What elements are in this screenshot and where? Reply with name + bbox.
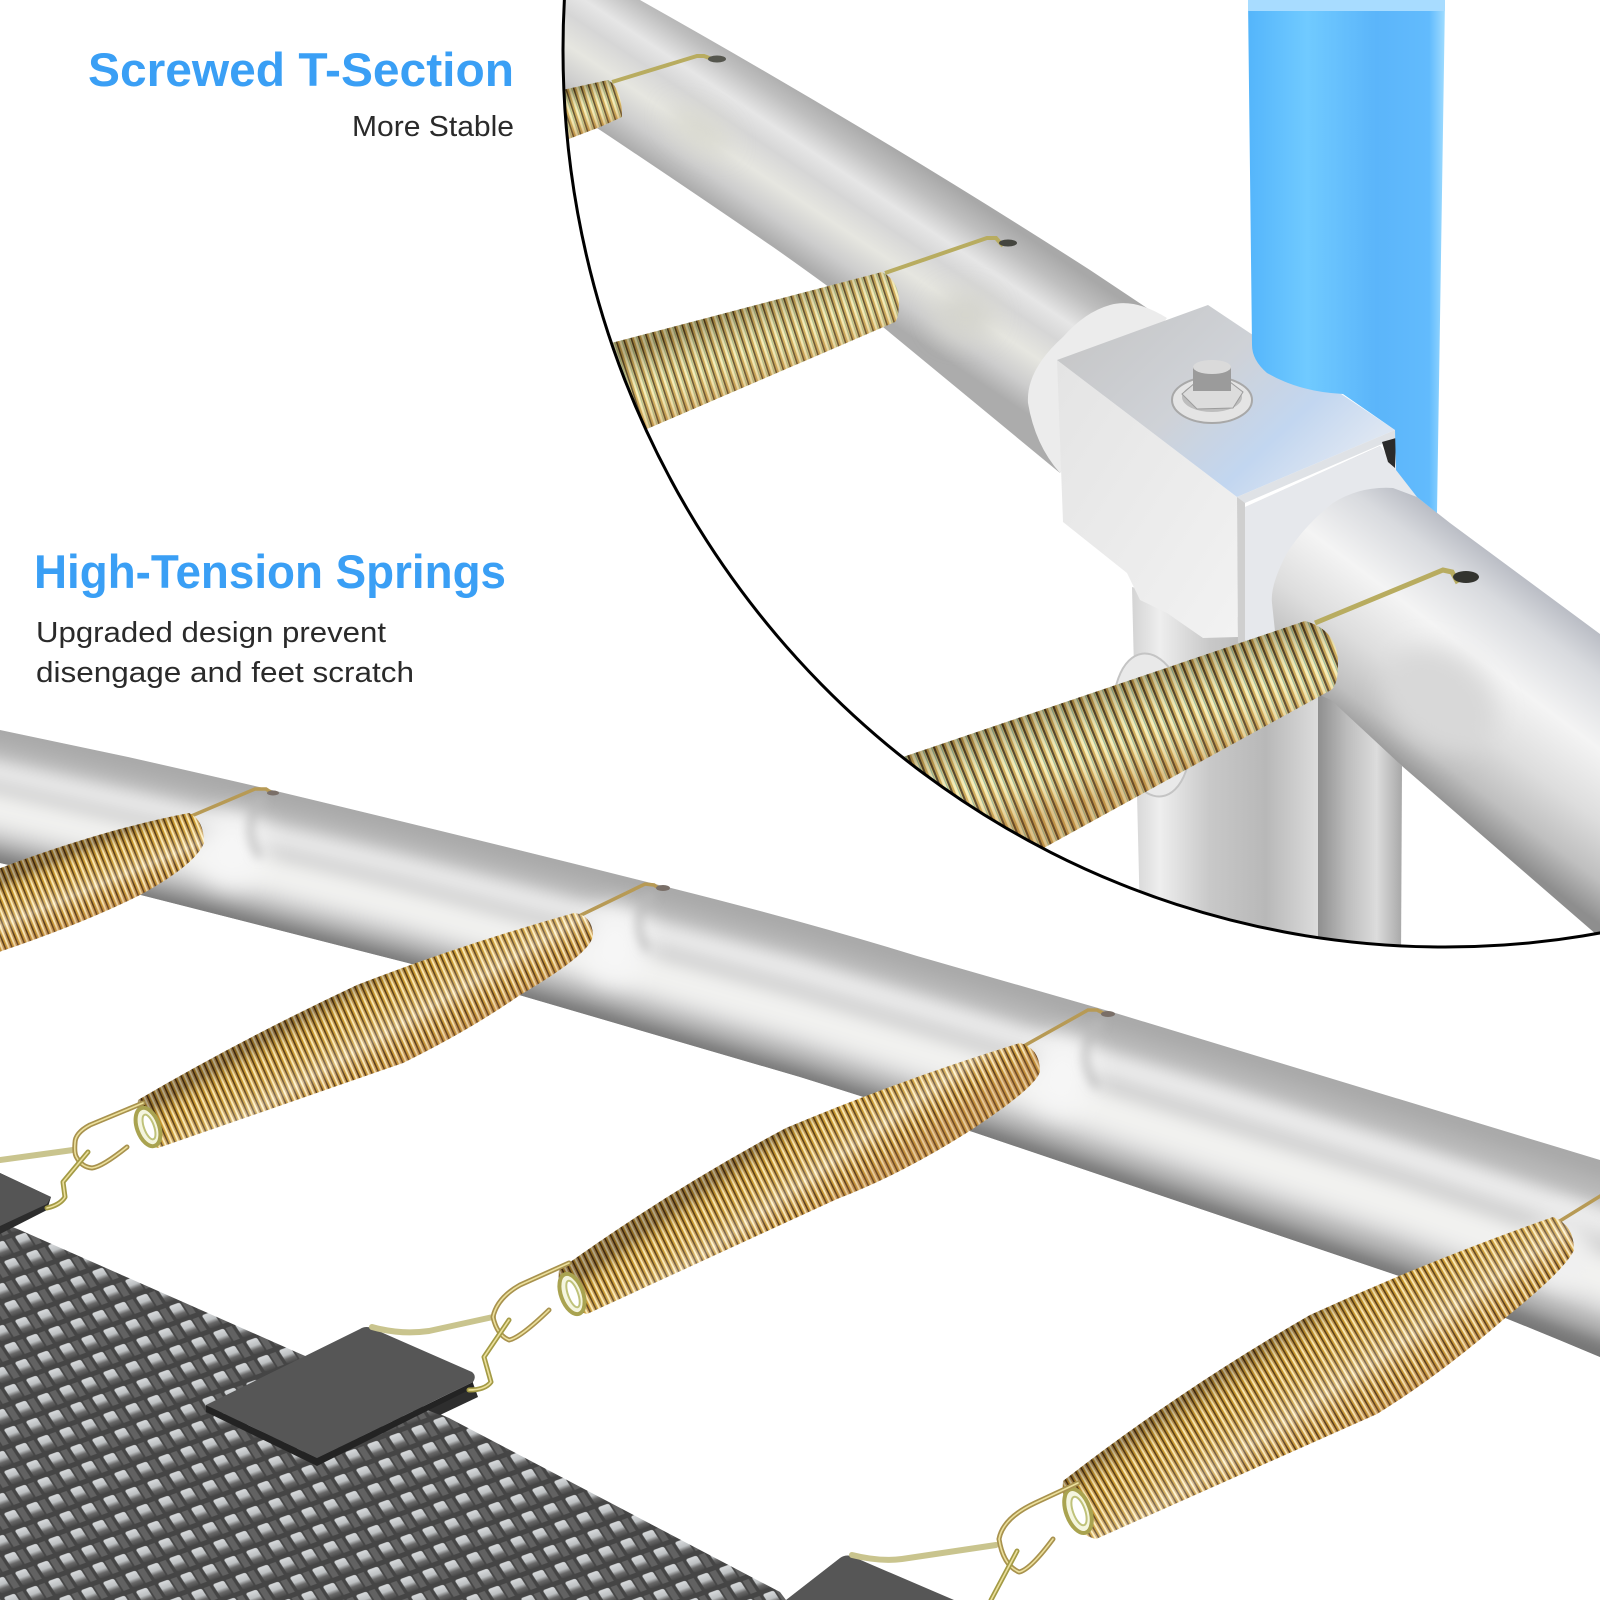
heading: Screwed T-Section: Screwed T-Section xyxy=(88,43,514,96)
upper frame tube xyxy=(540,0,1150,473)
hole marks on lower tube xyxy=(267,790,1115,1017)
upper spring 2 xyxy=(596,238,1017,432)
tube soft stain xyxy=(676,114,992,330)
leg bolt plate xyxy=(1115,652,1188,798)
spring hook assembly centre xyxy=(372,1263,569,1390)
lower spring 3 xyxy=(554,1010,1105,1317)
T-section bracket xyxy=(1057,305,1396,648)
tube dimples near spring holes xyxy=(198,814,1590,1284)
trampoline mesh mat xyxy=(0,1222,786,1600)
heading: High-Tension Springs: High-Tension Springs xyxy=(34,545,506,598)
text: spring description xyxy=(36,617,414,689)
lower trampoline frame tube xyxy=(0,730,1600,1357)
lower spring 4 xyxy=(1059,1190,1600,1539)
text: More Stable: More Stable xyxy=(352,111,514,143)
upper spring 3 xyxy=(900,570,1479,850)
lower spring 1 xyxy=(0,789,272,955)
spring hook assembly left xyxy=(0,1103,143,1208)
mesh pad left xyxy=(0,1173,51,1234)
mesh pad right xyxy=(786,1556,954,1600)
right frame tube xyxy=(1240,446,1600,955)
text: spring description: disengage and feet scratch xyxy=(36,657,414,689)
blue enclosure pole xyxy=(1248,0,1445,513)
detail magnifier circle xyxy=(540,0,1600,960)
lower spring 2 xyxy=(131,884,660,1150)
bolt and nut xyxy=(1172,360,1252,423)
upper spring 1 xyxy=(540,56,726,150)
upper tube collar xyxy=(1028,303,1167,473)
text: spring description: Upgraded design prevent xyxy=(36,617,386,649)
vertical leg xyxy=(1132,587,1402,960)
mesh pad centre xyxy=(206,1327,478,1466)
spring hook assembly right xyxy=(852,1483,1078,1600)
